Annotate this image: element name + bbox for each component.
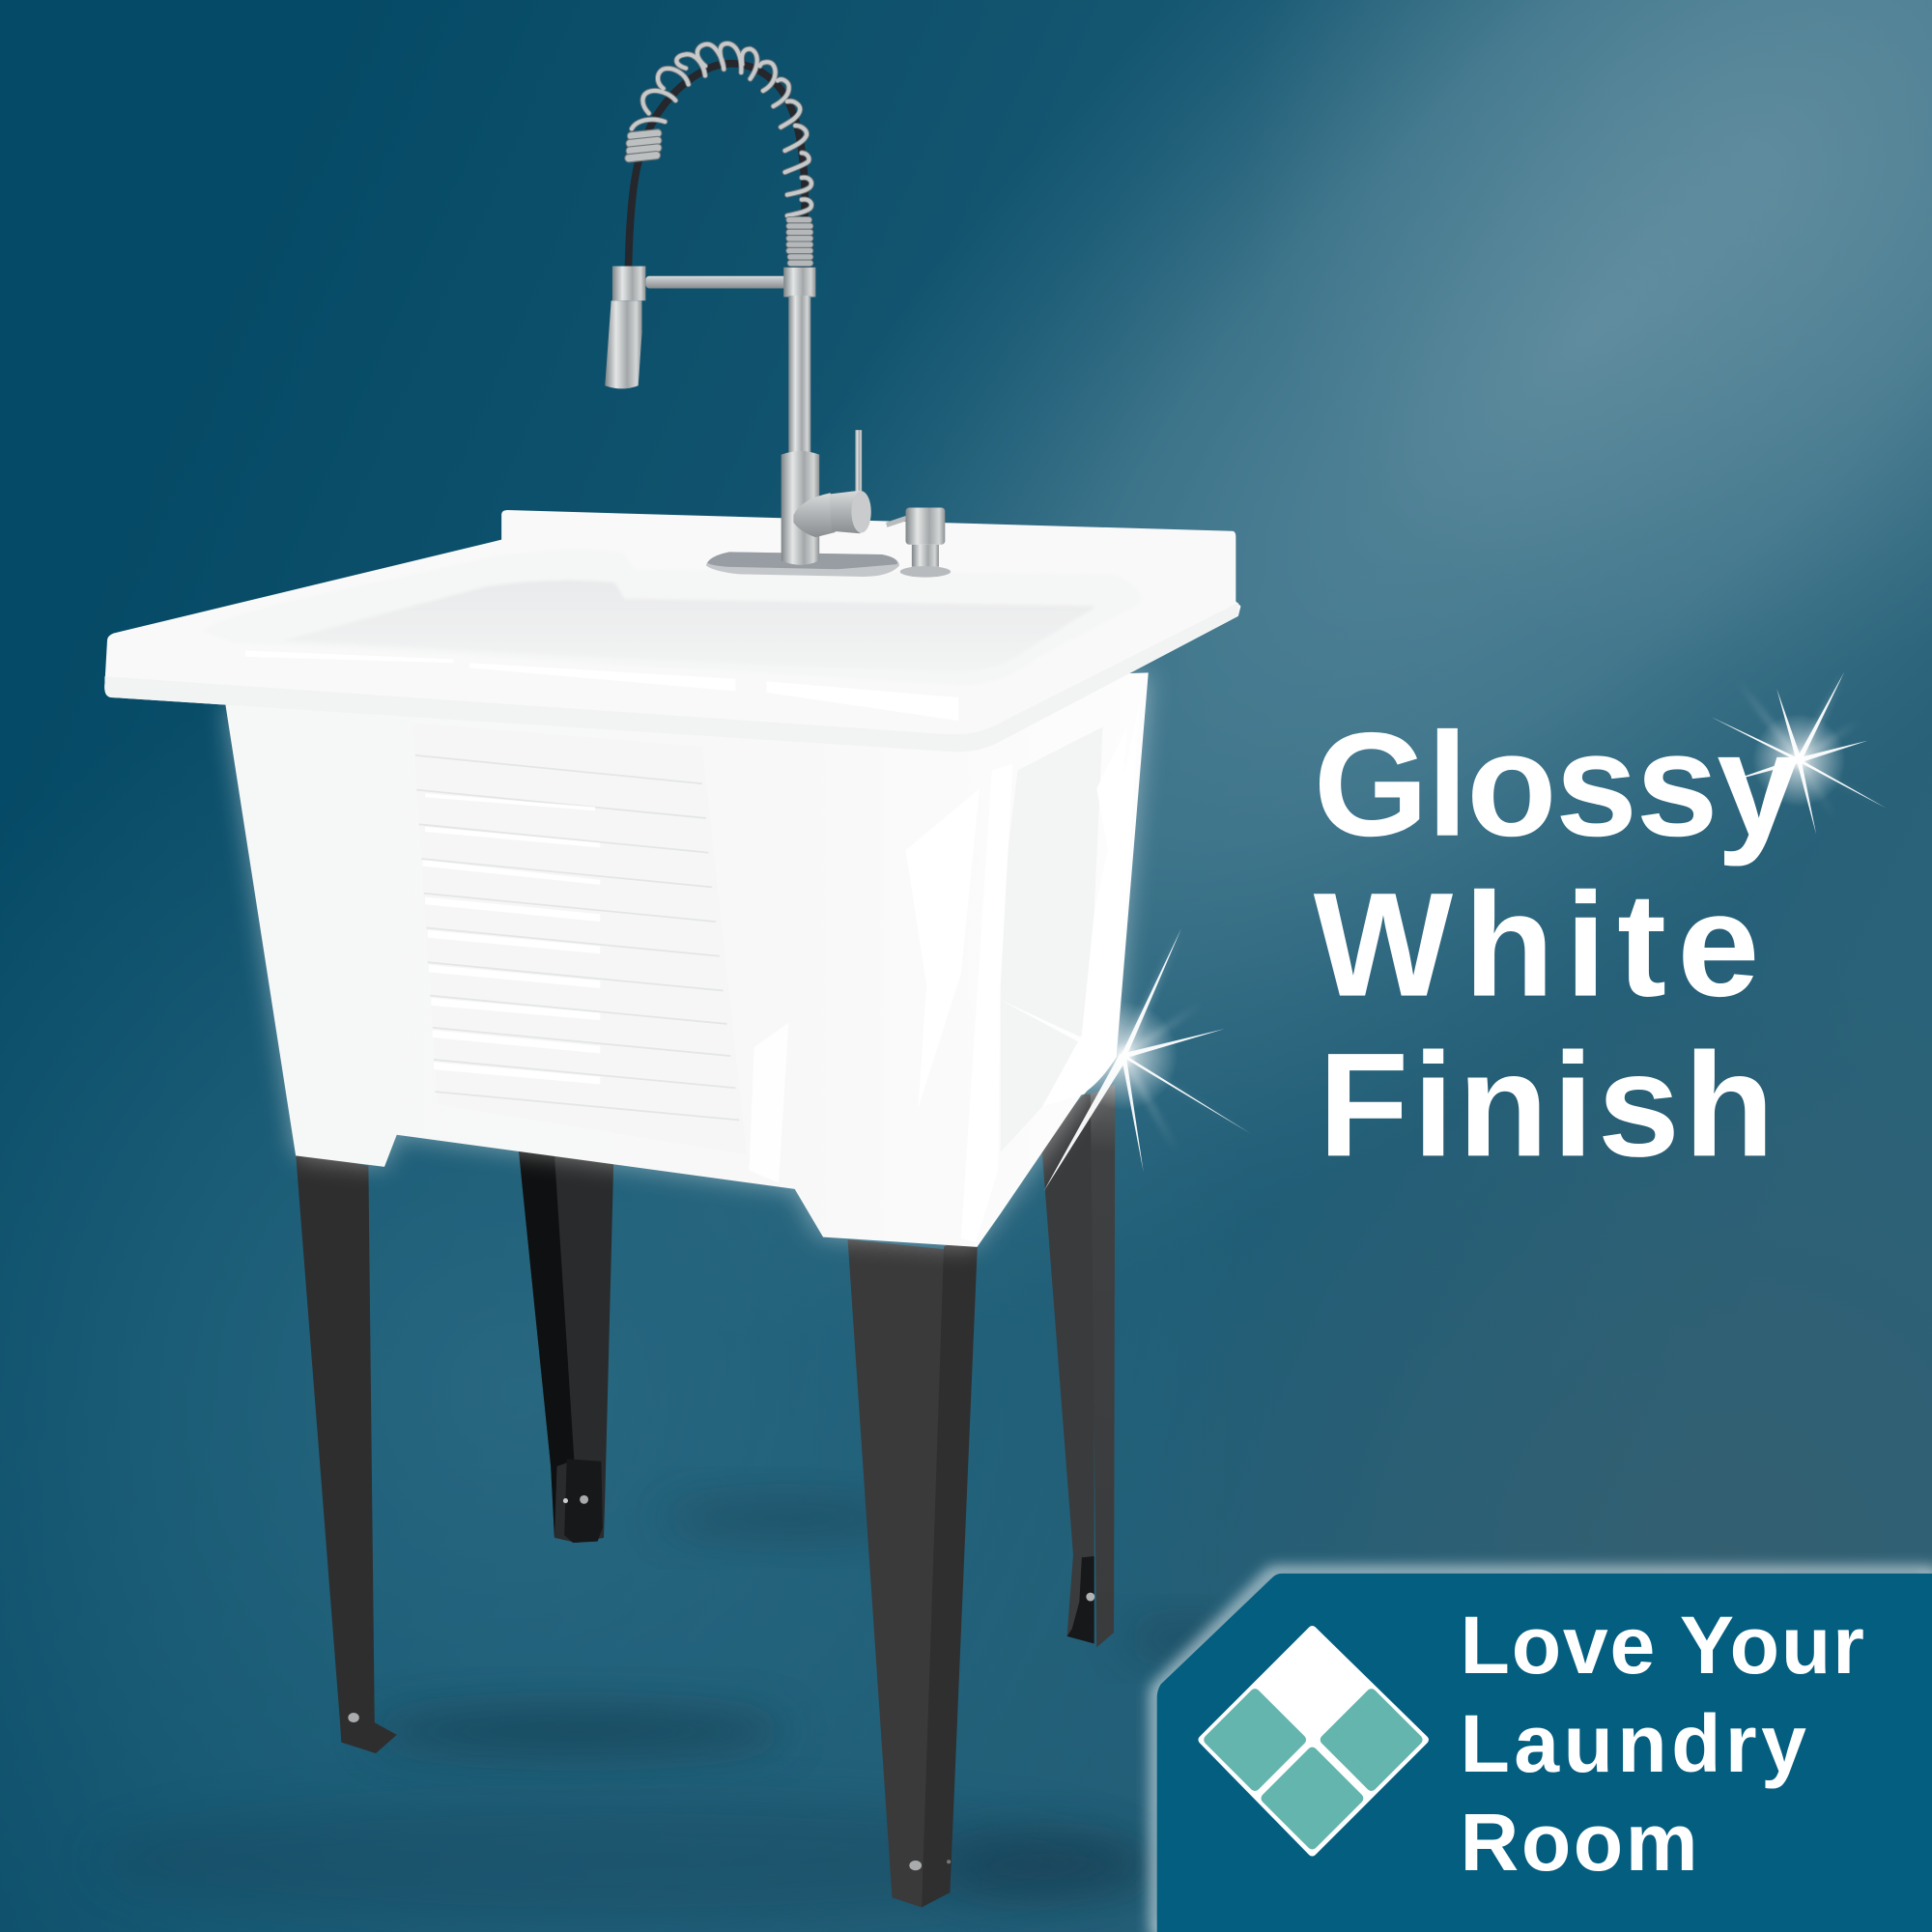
brand text [1460, 1600, 1864, 1888]
headline: Glossy White Finish [1314, 702, 1799, 1187]
leg: front right [848, 1225, 979, 1907]
tight spring, left [624, 128, 662, 162]
deck plate [706, 552, 899, 577]
leg: back left [519, 1151, 613, 1543]
basin deep well [282, 581, 1096, 672]
spring coil [632, 43, 811, 215]
glossy reflections [750, 702, 1140, 1242]
headline: Glossy White Finish: White [1314, 863, 1759, 1028]
handle lever [855, 430, 862, 497]
side face shading [1001, 727, 1103, 1152]
logo diamond [1203, 1631, 1424, 1852]
panel shape [1157, 1574, 1932, 1932]
sink rim and basin [104, 510, 1240, 752]
faucet base [781, 451, 819, 565]
rim lip [104, 603, 1238, 752]
rim [104, 510, 1240, 752]
tub body [225, 672, 1149, 1247]
brand text: Love Your [1460, 1600, 1864, 1690]
sink tub [225, 672, 1149, 1247]
tub glow [225, 675, 1149, 1247]
horizontal arm [645, 276, 791, 288]
brand panel [1157, 1574, 1932, 1932]
basin interior [202, 550, 1141, 685]
spray head [605, 300, 642, 388]
faucet [605, 43, 951, 578]
leg: back right [1041, 1084, 1115, 1647]
soap dispenser [886, 508, 951, 578]
sparkle on tub [999, 927, 1251, 1191]
left collar [612, 267, 645, 300]
sparkle on headline [1712, 671, 1887, 835]
floor shadows [99, 1498, 1244, 1922]
sink legs [296, 1084, 1115, 1907]
hose [629, 64, 805, 267]
rim highlights [245, 650, 958, 721]
louvered washboard panel [412, 724, 747, 1154]
handle cylinder [793, 491, 871, 537]
vertical spout [788, 296, 810, 453]
brand text: Laundry [1460, 1698, 1806, 1789]
tight spring, right [786, 216, 813, 267]
headline: Glossy White Finish: Glossy [1314, 702, 1799, 867]
leg: front left [296, 1153, 397, 1753]
right collar [783, 268, 815, 297]
brand text: Room [1460, 1797, 1698, 1888]
headline: Glossy White Finish: Finish [1319, 1022, 1775, 1187]
panel glow [1157, 1574, 1932, 1932]
